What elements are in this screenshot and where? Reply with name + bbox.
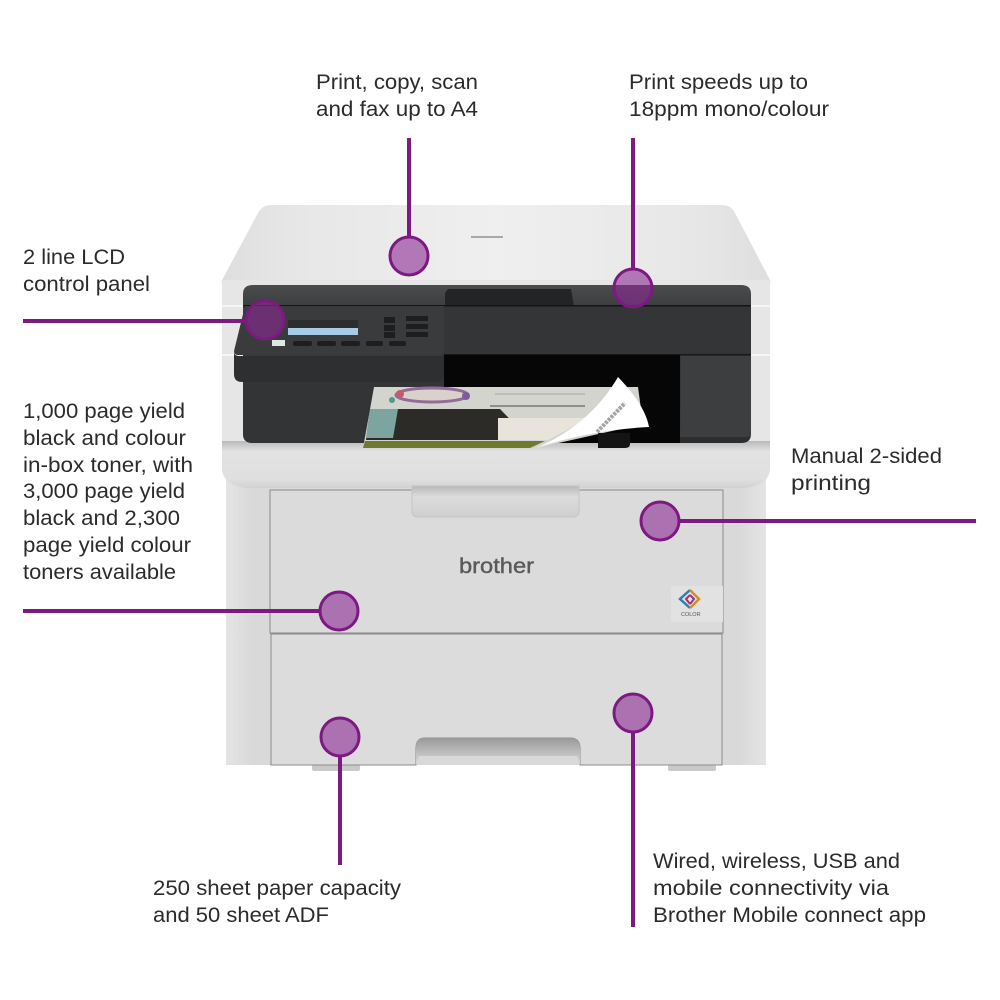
printed page [363, 377, 649, 448]
marker [614, 269, 652, 307]
label [791, 444, 942, 495]
leader line [338, 755, 342, 865]
callout: LCD control panel [23, 245, 284, 339]
right side block [680, 356, 751, 437]
tray notch [416, 738, 580, 765]
lid logo [471, 236, 503, 238]
leader line [631, 731, 635, 927]
page footer [363, 441, 545, 448]
feet [312, 765, 360, 771]
marker [641, 502, 679, 540]
left side block [243, 380, 372, 443]
label: black and colour [23, 426, 186, 450]
output tray foot [598, 433, 630, 448]
scanner front [444, 306, 751, 354]
label: 250 sheet paper capacity [153, 876, 401, 900]
leader line [631, 138, 635, 270]
label: page yield colour [23, 533, 191, 557]
leader line [407, 138, 411, 238]
callout: manual duplex [641, 444, 976, 540]
label: control panel [23, 272, 150, 296]
front handle [412, 486, 579, 517]
color badge [671, 586, 723, 622]
page photo [366, 409, 530, 440]
page graphic [396, 388, 468, 402]
front door [270, 490, 723, 633]
upper side strips [222, 280, 770, 445]
leader line [678, 519, 976, 523]
label: and 50 sheet ADF [153, 903, 329, 927]
label: Print, copy, scan [316, 70, 478, 94]
collar band [222, 441, 770, 488]
scanner lid [221, 205, 771, 282]
label: Brother Mobile connect app [653, 903, 926, 927]
marker [246, 301, 284, 339]
label: black and 2,300 [23, 506, 180, 530]
label: Wired, wireless, USB and [653, 849, 900, 873]
label: printing [791, 471, 871, 495]
label: in-box toner, with [23, 453, 193, 477]
paper tray [271, 634, 722, 765]
label [316, 70, 478, 121]
label [153, 876, 401, 927]
printer [221, 205, 771, 771]
marker [390, 237, 428, 275]
callout: toner yield [23, 399, 358, 630]
brother logo: brother [459, 555, 534, 578]
callout: paper capacity [153, 718, 401, 927]
label [23, 245, 150, 296]
label: 18ppm mono/colour [629, 97, 829, 121]
label: 3,000 page yield [23, 479, 185, 503]
control panel [234, 306, 444, 382]
label: 1,000 page yield [23, 399, 185, 423]
leader line [23, 319, 247, 323]
label: Manual 2-sided [791, 444, 942, 468]
label: and fax up to A4 [316, 97, 478, 121]
marker [614, 694, 652, 732]
label: 2 line LCD [23, 245, 125, 269]
page text [490, 405, 585, 407]
callout: print copy scan fax [316, 70, 478, 275]
curled sheet [536, 377, 649, 448]
callout: print speeds [614, 70, 829, 307]
label: Print speeds up to [629, 70, 808, 94]
scanner slot [445, 289, 574, 306]
lcd screen [288, 320, 358, 328]
callout: connectivity [614, 694, 926, 927]
label [23, 399, 193, 584]
label: toners available [23, 560, 176, 584]
lower body [226, 470, 766, 765]
dark output section [243, 285, 751, 443]
output opening [444, 355, 680, 443]
color badge: COLOR [681, 612, 701, 618]
marker [320, 592, 358, 630]
label: mobile connectivity via [653, 876, 889, 900]
leader line [23, 609, 321, 613]
label [629, 70, 829, 121]
keys [293, 316, 428, 346]
marker [321, 718, 359, 756]
label [653, 849, 926, 927]
